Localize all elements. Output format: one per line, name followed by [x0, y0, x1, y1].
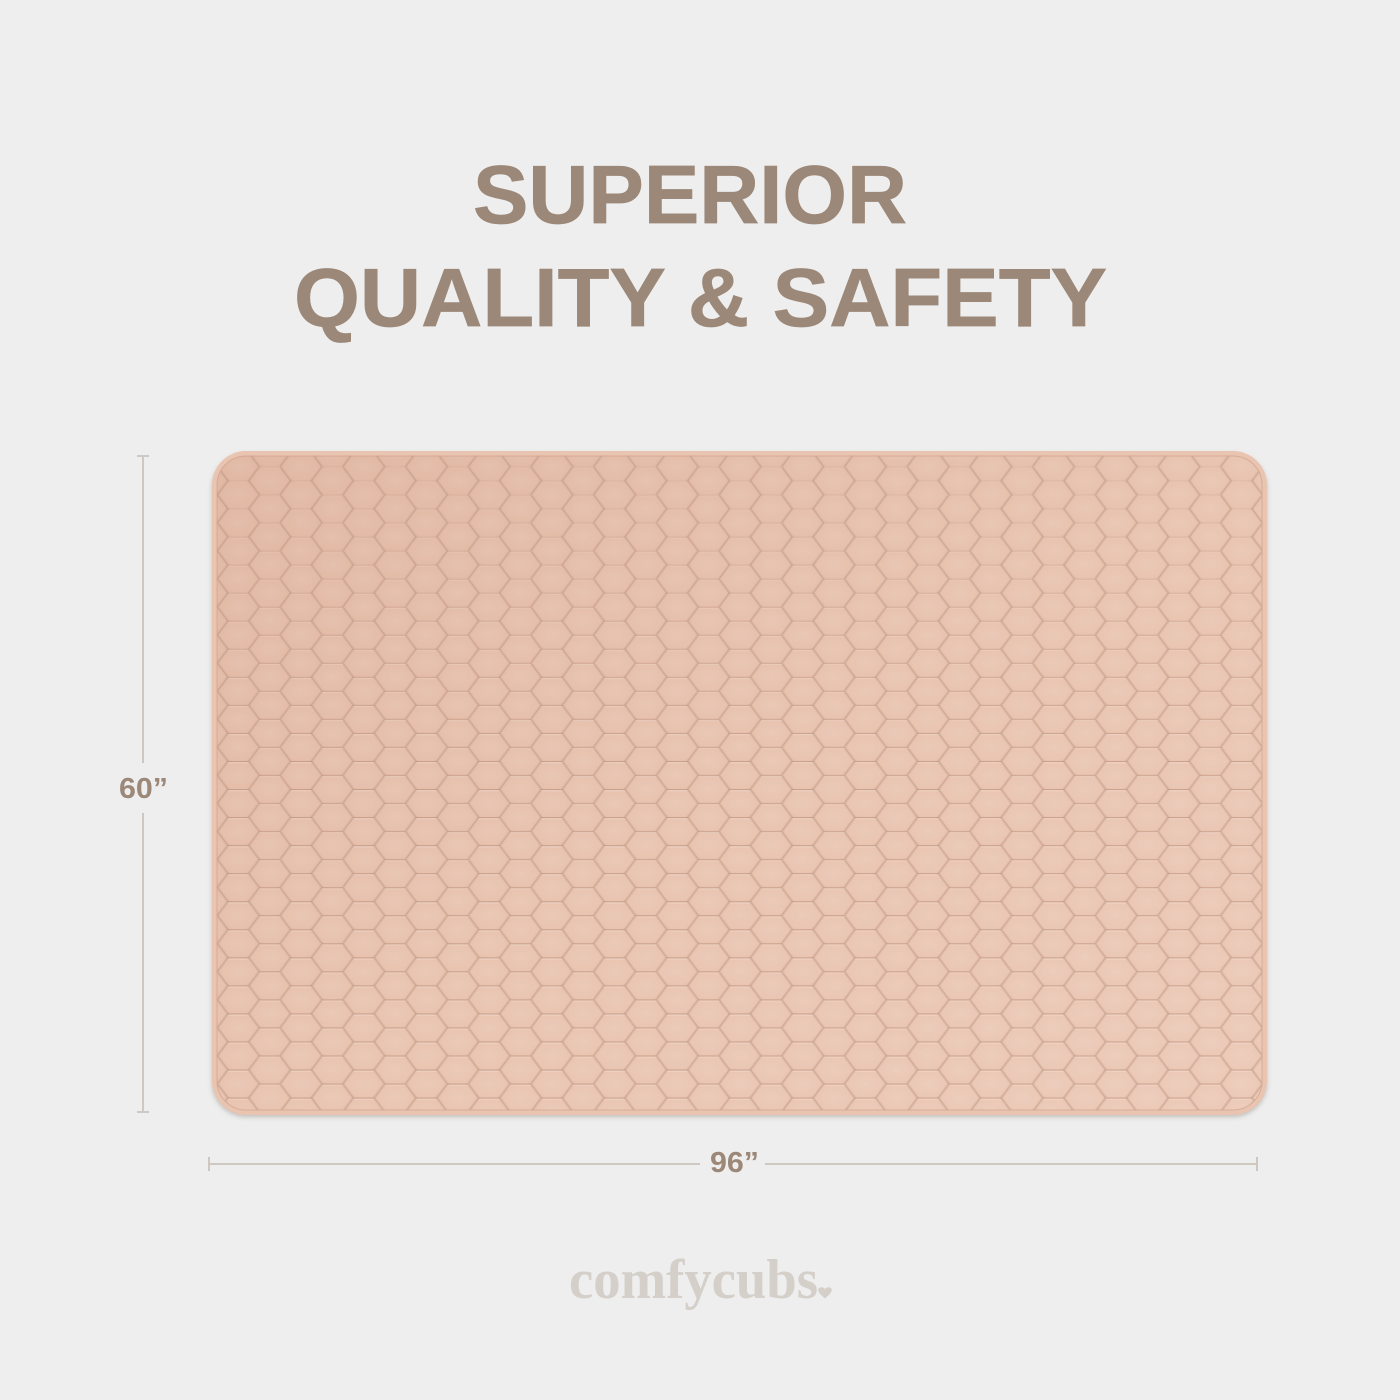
width label: 96”	[710, 1147, 759, 1179]
title line 2: QUALITY & SAFETY	[294, 251, 1107, 344]
width dimension	[209, 1147, 1257, 1179]
mat shadow	[212, 454, 1267, 1117]
quilted play mat	[212, 451, 1267, 1117]
infographic canvas	[120, 165, 1270, 1310]
height dimension	[119, 456, 168, 1112]
brand logo	[569, 1249, 832, 1311]
honeycomb stitching	[217, 456, 1262, 1110]
height line	[137, 456, 149, 1112]
width line	[209, 1157, 1257, 1171]
honeycomb horizontal seams	[217, 456, 1262, 1110]
mat binding edge	[212, 451, 1267, 1115]
binding seam	[217, 456, 1262, 1110]
height label: 60”	[119, 773, 168, 805]
title	[294, 148, 1107, 344]
mat quilted body	[217, 456, 1262, 1110]
logo wordmark: comfycubs	[569, 1249, 818, 1311]
icon: heart	[818, 1287, 832, 1298]
title line 1: SUPERIOR	[473, 148, 907, 241]
